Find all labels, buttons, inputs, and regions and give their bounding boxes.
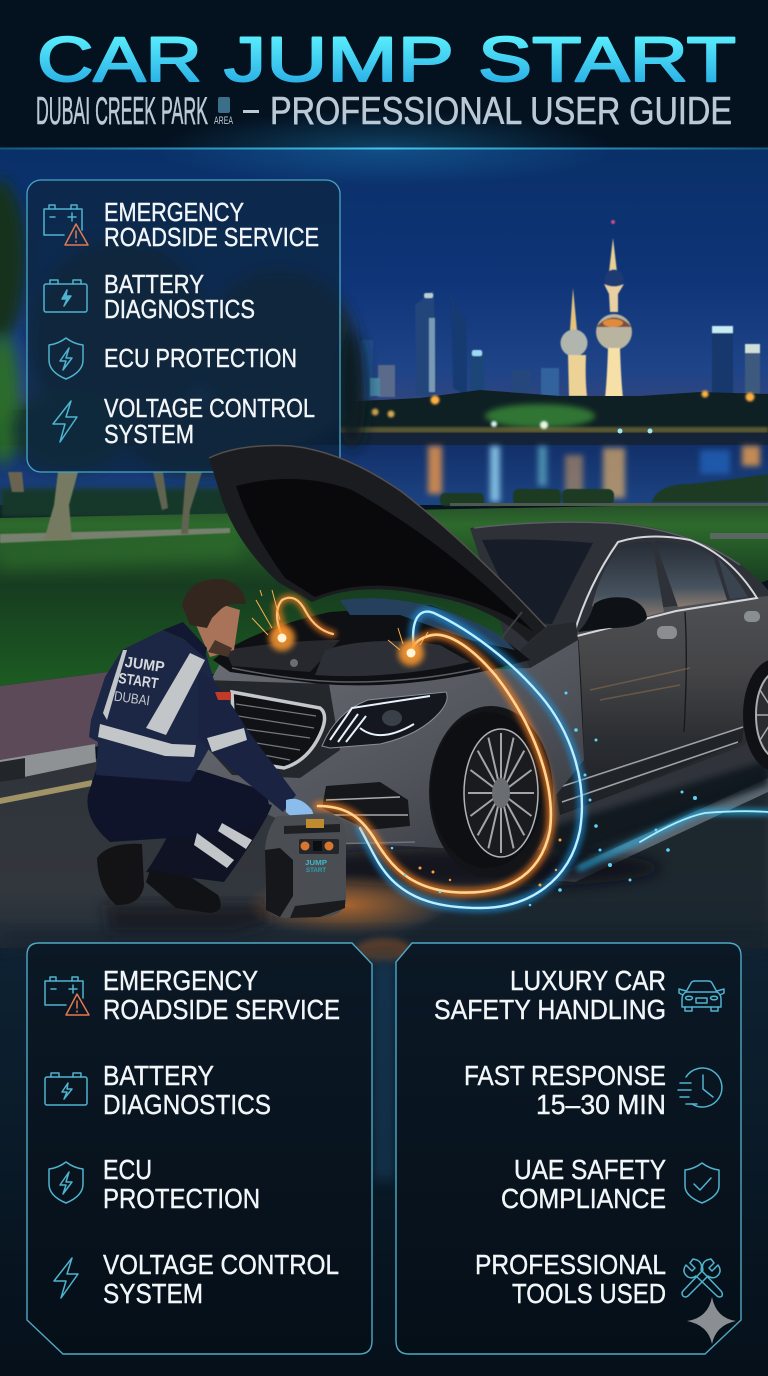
control panel bbox=[299, 839, 339, 854]
quarter window bbox=[718, 558, 748, 599]
item: emergency roadside service: EMERGENCY bbox=[103, 965, 258, 996]
panel outline bbox=[27, 943, 372, 1354]
icon: battery warning bbox=[44, 205, 88, 245]
road stripe bbox=[545, 778, 768, 882]
header background bbox=[0, 0, 768, 148]
item: voltage control system: SYSTEM bbox=[103, 1278, 203, 1309]
item: fast response: 15–30 MIN bbox=[536, 1089, 666, 1120]
collar bbox=[163, 622, 207, 658]
sky bbox=[0, 148, 768, 410]
icon: battery warning bbox=[45, 977, 89, 1015]
item: voltage control system: SYSTEM bbox=[104, 419, 194, 449]
fender and grille surround bbox=[200, 680, 340, 778]
orange particles bbox=[418, 838, 562, 886]
header band bbox=[0, 0, 768, 186]
back lettering: JUMP bbox=[124, 654, 166, 676]
treeline and far shore bbox=[340, 390, 768, 445]
hedges bbox=[0, 474, 768, 518]
handle bbox=[284, 824, 340, 834]
item: battery diagnostics: DIAGNOSTICS bbox=[103, 1089, 271, 1120]
roof and greenhouse bbox=[470, 521, 768, 700]
man shadow bbox=[105, 905, 270, 935]
jump starter box bbox=[245, 813, 445, 937]
paving bbox=[0, 672, 108, 760]
scene: park and skyline background bbox=[0, 148, 768, 950]
base bbox=[290, 900, 345, 918]
dark right roadway bbox=[380, 770, 768, 950]
item: voltage control system: VOLTAGE CONTROL bbox=[104, 393, 315, 423]
lawn bbox=[0, 503, 768, 686]
item: uae safety compliance bbox=[501, 1154, 666, 1214]
icon: lightning bbox=[53, 401, 77, 442]
back boot bbox=[97, 844, 144, 905]
rear wheel bbox=[743, 659, 768, 771]
icon: shield with bolt bbox=[49, 1162, 83, 1203]
case bbox=[265, 813, 346, 918]
item: professional tools used: PROFESSIONAL bbox=[475, 1249, 666, 1280]
fender shoulder bbox=[520, 622, 578, 668]
reflective strips bbox=[98, 650, 252, 868]
item: fast response: FAST RESPONSE bbox=[464, 1060, 666, 1091]
item: uae safety compliance: COMPLIANCE bbox=[501, 1183, 666, 1214]
header glow bbox=[154, 110, 614, 186]
rear side window bbox=[655, 541, 727, 607]
creek water bbox=[0, 445, 768, 505]
blue particles bbox=[391, 692, 697, 906]
roof highlight bbox=[474, 522, 740, 565]
arm bbox=[198, 670, 296, 812]
front boot bbox=[146, 870, 221, 913]
title: START bbox=[478, 25, 736, 95]
item: emergency roadside service bbox=[103, 965, 340, 1025]
item: professional tools used: TOOLS USED bbox=[512, 1278, 666, 1309]
technician bbox=[87, 579, 317, 913]
title: JUMP bbox=[224, 25, 454, 95]
icon: car bbox=[679, 981, 724, 1011]
item: voltage control system bbox=[103, 1249, 339, 1309]
icon: lightning bbox=[54, 1258, 78, 1298]
right clamp spark bbox=[388, 628, 428, 666]
jacket bbox=[89, 630, 215, 782]
icon: shield with bolt bbox=[49, 338, 83, 379]
item: professional tools used bbox=[475, 1249, 666, 1309]
left clamp spark bbox=[252, 590, 295, 651]
panel background bbox=[27, 180, 340, 472]
item: luxury car safety handling bbox=[434, 965, 666, 1025]
grille bbox=[232, 692, 325, 768]
sparkle mark bbox=[687, 1297, 736, 1344]
item: battery diagnostics: BATTERY bbox=[103, 1060, 214, 1091]
item: luxury car safety handling: LUXURY CAR bbox=[510, 965, 666, 996]
front lower leg bbox=[146, 785, 272, 882]
road to panel fade bbox=[0, 930, 768, 954]
item: battery diagnostics: DIAGNOSTICS bbox=[104, 294, 255, 324]
lower background bbox=[0, 930, 768, 1376]
hood clamp cable bbox=[276, 598, 333, 636]
item: battery diagnostics bbox=[103, 1060, 271, 1120]
item: emergency roadside service: ROADSIDE SERVICE bbox=[104, 222, 319, 252]
subtitle bbox=[36, 90, 732, 133]
tree trunks bbox=[8, 472, 202, 540]
panel: left services bbox=[27, 943, 372, 1354]
back lettering bbox=[113, 653, 166, 710]
rear hood glow panel bbox=[340, 598, 515, 650]
wheel arch bbox=[429, 706, 553, 878]
hood top bbox=[213, 605, 530, 685]
item: fast response bbox=[464, 1060, 666, 1120]
item: emergency roadside service: EMERGENCY bbox=[104, 197, 244, 227]
title: CAR bbox=[37, 25, 202, 95]
side sill bbox=[555, 727, 744, 812]
bumper lip bbox=[320, 842, 415, 844]
icon: battery bbox=[44, 280, 87, 312]
subtitle: DUBAI CREEK PARK bbox=[36, 90, 208, 133]
kerb bbox=[0, 744, 96, 782]
ground shadow bbox=[280, 848, 660, 888]
landmark towers bbox=[560, 220, 632, 398]
door lines and handles bbox=[578, 611, 760, 750]
panel: top feature list bbox=[27, 180, 340, 472]
uae sleeve patch bbox=[215, 692, 231, 700]
header rule bbox=[0, 148, 768, 150]
lower label: START bbox=[306, 868, 326, 874]
sill shadow bbox=[540, 760, 768, 860]
item: ecu protection: ECU bbox=[103, 1154, 152, 1185]
title bbox=[37, 25, 736, 95]
mirror bbox=[578, 597, 647, 632]
window chrome bbox=[573, 536, 757, 637]
sill chrome bbox=[557, 727, 743, 802]
orange cable bbox=[318, 635, 551, 893]
item: luxury car safety handling: SAFETY HANDLING bbox=[434, 994, 666, 1025]
lower intake bbox=[322, 782, 410, 830]
device label: JUMP bbox=[305, 860, 327, 867]
lane marking bbox=[0, 780, 92, 804]
back lettering: DUBAI bbox=[113, 688, 151, 708]
item: emergency roadside service bbox=[104, 197, 319, 252]
open hood bbox=[209, 446, 546, 642]
front wheel bbox=[431, 712, 543, 868]
road bbox=[0, 660, 768, 950]
panel: right services bbox=[396, 943, 741, 1354]
engine details bbox=[225, 640, 480, 682]
item: ecu protection bbox=[103, 1154, 260, 1214]
trees behind panel bbox=[0, 180, 366, 475]
orange floor glow bbox=[245, 873, 445, 937]
sparks bbox=[252, 590, 697, 906]
park paths bbox=[0, 503, 768, 570]
front side window bbox=[592, 542, 664, 618]
back lettering: START bbox=[117, 670, 159, 692]
icon: battery bbox=[45, 1073, 87, 1105]
water reflections bbox=[428, 446, 760, 502]
city skyline bbox=[361, 290, 760, 398]
warm floor glow bbox=[356, 938, 412, 962]
icon: shield check bbox=[685, 1163, 719, 1203]
item: battery diagnostics bbox=[104, 269, 255, 324]
body side bbox=[530, 596, 768, 815]
windshield bbox=[482, 539, 593, 624]
blue edge glow bbox=[372, 960, 396, 1180]
panel outline bbox=[396, 943, 741, 1354]
item: battery diagnostics: BATTERY bbox=[104, 269, 204, 299]
blue cable bbox=[360, 612, 582, 908]
road energy streak bbox=[580, 811, 768, 868]
item: emergency roadside service: ROADSIDE SERVICE bbox=[103, 994, 340, 1025]
icon: speed clock bbox=[678, 1068, 722, 1107]
item: ecu protection: ECU PROTECTION bbox=[104, 343, 297, 373]
thigh and hip bbox=[87, 770, 269, 842]
icon: crossed tools bbox=[682, 1259, 722, 1297]
front body bbox=[196, 640, 584, 850]
item: voltage control system bbox=[104, 393, 315, 449]
grip bbox=[265, 848, 293, 917]
glove bbox=[286, 799, 317, 825]
item: uae safety compliance: UAE SAFETY bbox=[514, 1154, 666, 1185]
headlight bbox=[322, 692, 447, 748]
item: voltage control system: VOLTAGE CONTROL bbox=[103, 1249, 339, 1280]
neck and head bbox=[182, 579, 246, 657]
glowing cables bbox=[276, 598, 768, 908]
car bbox=[196, 446, 768, 888]
subtitle: AREA bbox=[214, 115, 233, 127]
item: ecu protection: PROTECTION bbox=[103, 1183, 260, 1214]
